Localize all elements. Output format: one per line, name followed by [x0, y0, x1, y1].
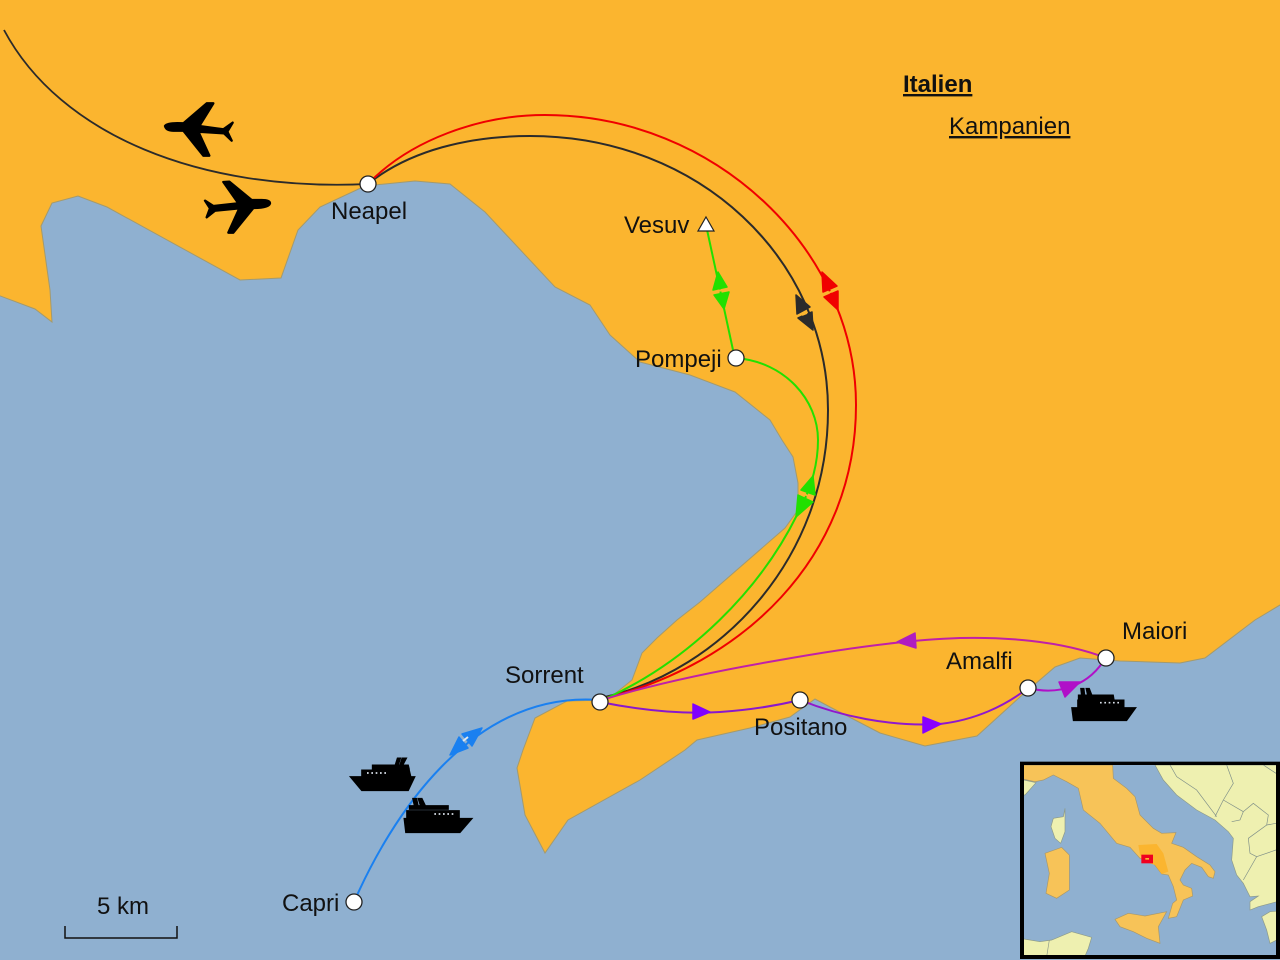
label: Neapel: Neapel: [331, 198, 407, 225]
icon: plane upper: [165, 103, 233, 156]
label: Positano: Positano: [754, 714, 847, 741]
route: green Pompeji to Vesuv: [706, 225, 733, 350]
label: Capri: Capri: [282, 890, 339, 917]
label: Maiori: Maiori: [1122, 618, 1187, 645]
route: purple Sorrent to Positano: [600, 700, 800, 719]
scale bar: [65, 893, 177, 938]
region: Kampanien: [1138, 844, 1168, 874]
route: black Neapel to Sorrent: [368, 136, 828, 697]
france corner: [1024, 780, 1036, 796]
label: Amalfi: Amalfi: [946, 648, 1013, 675]
corsica: [1051, 808, 1065, 843]
route: blue Capri to Sorrent: [354, 699, 600, 902]
route: red Neapel to Sorrent: [368, 115, 856, 698]
balkans: [1155, 765, 1280, 910]
route: purple Amalfi to Maiori: [1028, 657, 1106, 697]
route: green Pompeji to Sorrent: [607, 358, 818, 698]
label: Sorrent: Sorrent: [505, 662, 584, 689]
icon: ship lower: [404, 798, 472, 833]
inset map: Italy locator: [1020, 762, 1280, 960]
icon: plane lower: [205, 182, 270, 233]
sicily: [1115, 912, 1167, 943]
marker: map extent: [1141, 855, 1153, 863]
markers: stops: [346, 176, 1114, 910]
icon: ship upper left: [350, 758, 415, 791]
label: Kampanien: Kampanien: [949, 113, 1070, 140]
icon: ship Maiori: [1072, 688, 1136, 721]
label: Vesuv: Vesuv: [624, 212, 689, 239]
scale bar: 5 km: [97, 893, 149, 920]
peloponnese: [1261, 910, 1276, 944]
north africa: [1024, 931, 1092, 955]
italy mainland: [1020, 765, 1215, 918]
route: flight to Neapel: [4, 30, 368, 185]
route: purple Positano to Amalfi: [800, 688, 1028, 733]
label: Pompeji: Pompeji: [635, 346, 722, 373]
route: magenta Maiori to Sorrent: [602, 633, 1106, 700]
sardinia: [1045, 847, 1069, 898]
label: Italien: Italien: [903, 71, 972, 98]
icon: Vesuv triangle: [698, 217, 714, 231]
